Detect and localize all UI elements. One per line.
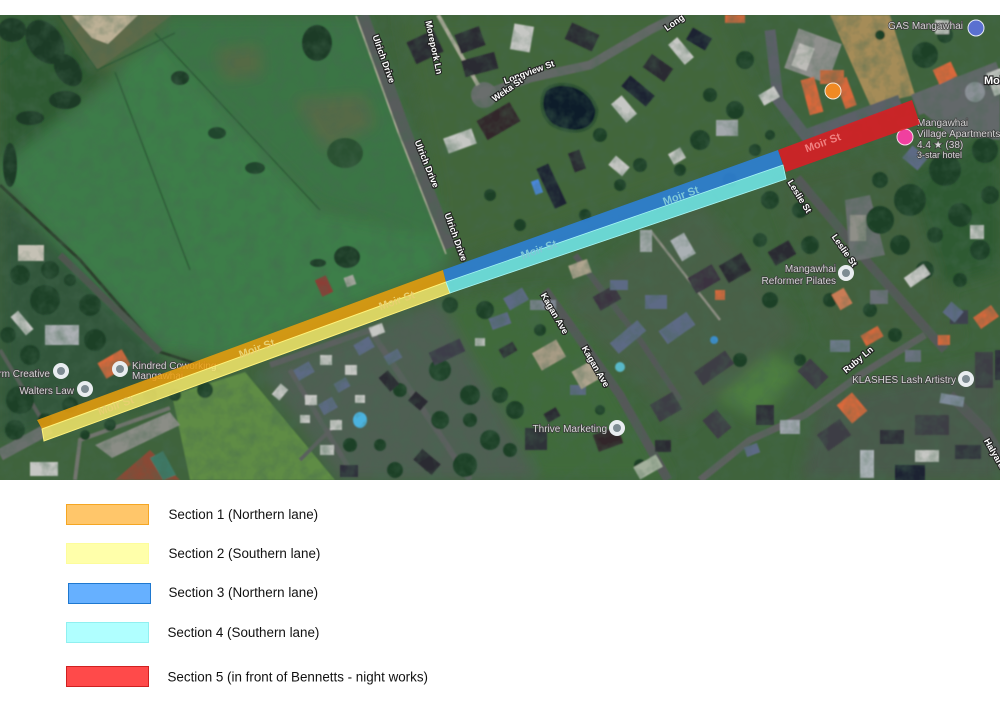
place labels: 3-star hotel: [917, 150, 962, 160]
Moir St labels on bands: Moir St: [377, 289, 417, 313]
legend: [66, 504, 428, 686]
road labels: Ruby Ln: [841, 344, 875, 375]
legend item: section 4: [66, 622, 319, 642]
pond: [542, 84, 597, 131]
legend item: section 1: Section 1 (Northern lane): [168, 507, 318, 522]
road: Leslie St: [797, 178, 945, 350]
field hedges: [0, 15, 320, 270]
field trees: [0, 13, 363, 268]
Moir St labels on bands: Moir St: [661, 184, 701, 208]
road labels: Ulrich Drive: [442, 212, 469, 262]
section 5 band: [778, 100, 920, 172]
legend item: section 5: [66, 666, 428, 686]
Moir St labels on bands: Moir St: [519, 238, 559, 262]
place labels: Thrive Marketing: [533, 424, 607, 435]
place pins: [53, 20, 984, 436]
road labels: Long: [662, 12, 686, 33]
road: Kagan Ave: [545, 290, 668, 480]
Moir St labels on bands: Moir St: [237, 337, 277, 361]
place labels: Walters Law: [19, 386, 75, 397]
road labels: Kagan Ave: [539, 291, 570, 336]
road: Ulrich Drive: [362, 15, 450, 248]
satellite map: [0, 12, 1000, 481]
houses: [10, 15, 1000, 481]
car park: [770, 30, 900, 135]
paddocks: [0, 15, 1000, 480]
legend item: section 4: Section 4 (Southern lane): [168, 625, 319, 640]
gravel yard and courts: [95, 195, 885, 480]
legend item: section 1: [66, 504, 318, 524]
legend item: section 2: [66, 544, 320, 564]
road: western Moir St: [0, 428, 50, 455]
section 2 band: southern lane: [42, 282, 450, 441]
place labels: GAS Mangawhai: [888, 21, 963, 32]
road: Halyard: [950, 395, 1000, 455]
legend item: section 5: Section 5 (in front of Bennetts - night works): [168, 670, 428, 684]
road labels: Ulrich Drive: [413, 139, 441, 189]
road labels: Morepork Ln: [423, 20, 444, 75]
road labels: Leslie St: [785, 178, 814, 215]
legend item: section 2: Section 2 (Southern lane): [168, 546, 320, 561]
section 1 band: northern lane: [37, 270, 446, 429]
pool: [353, 412, 367, 428]
road labels: Ulrich Drive: [370, 34, 397, 84]
Moir St labels on bands: [96, 131, 843, 418]
place labels: Mangawhai: [132, 371, 183, 382]
place labels: KLASHES Lash Artistry: [852, 375, 956, 386]
section 3 band: northern lane: [443, 150, 783, 282]
residential trees: [0, 27, 999, 478]
place labels: Village Apartments: [917, 129, 1000, 140]
road labels: [370, 12, 1000, 470]
Moir St labels on bands: Moir St: [803, 131, 843, 155]
upper-left paddock and sand patch: [60, 15, 915, 480]
road: Longview St and Weka St: [494, 15, 680, 92]
legend item: section 3: Section 3 (Northern lane): [168, 585, 318, 600]
place labels: Reformer Pilates: [762, 276, 836, 287]
road labels: Weka St: [490, 75, 524, 104]
place labels: Mangawhai: [917, 118, 968, 129]
road: Morepork Ln: [438, 15, 478, 85]
road: Ruby Ln: [700, 335, 925, 480]
road labels: Longview St: [502, 58, 556, 86]
road labels: Leslie St: [830, 232, 859, 268]
legend item: section 3: [68, 584, 318, 604]
side lanes: [0, 230, 720, 480]
place labels: 4.4 ★ (38): [917, 140, 963, 151]
road: east Moir St: [915, 72, 1000, 105]
place labels: Kindred Coworking: [132, 361, 216, 372]
place labels: [0, 21, 1000, 435]
Moir St labels on bands: Moir St: [96, 394, 136, 418]
road labels: Kagan Ave: [580, 344, 611, 389]
section 4 band: southern lane: [446, 165, 786, 293]
place labels: Mangawhai: [785, 264, 836, 275]
